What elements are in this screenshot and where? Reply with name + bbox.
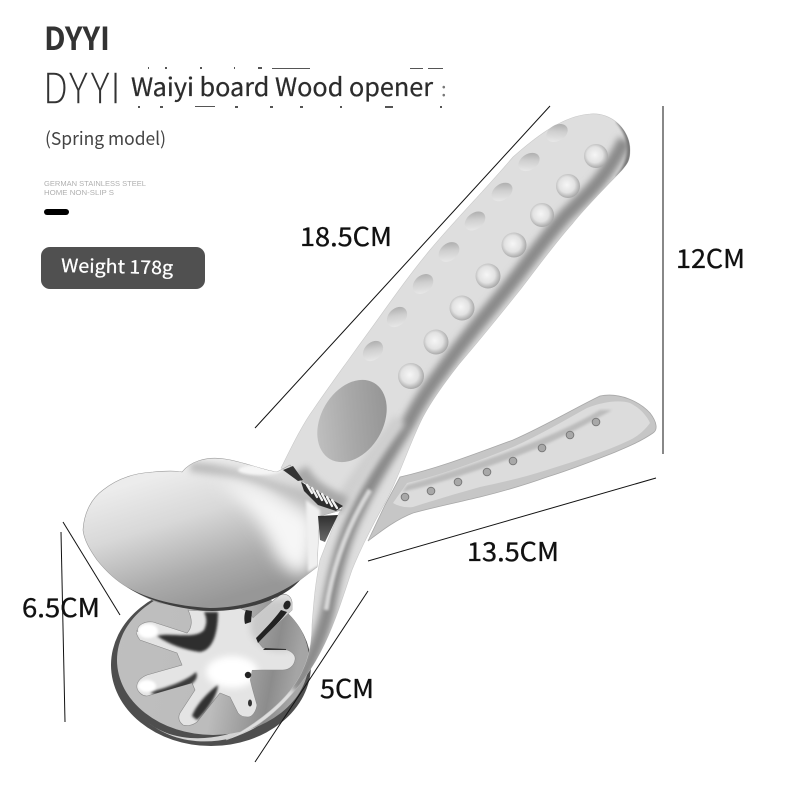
upper handle: [226, 114, 630, 740]
spoon plate: [83, 458, 342, 611]
brand title: DYYI: [44, 14, 110, 60]
dimension label: head width: 5CM: [320, 669, 374, 706]
small material note: [44, 179, 146, 197]
thumb oval: [303, 367, 401, 475]
disc base: [111, 584, 311, 746]
small material note: GERMAN STAINLESS STEEL: [44, 179, 146, 188]
product name: Waiyi board Wood opener: [131, 68, 433, 104]
bump row: [398, 144, 608, 389]
rivets: [401, 418, 600, 501]
dimension label: height: 12CM: [676, 239, 745, 276]
weight badge: Weight 178g: [61, 252, 174, 280]
lower handle: [368, 395, 656, 541]
accent bar: [44, 209, 69, 215]
tool illustration: [83, 114, 656, 746]
dimension label: lower handle: 13.5CM: [467, 532, 559, 569]
clipped text fragments: [138, 67, 443, 108]
dimension label: head length: 6.5CM: [22, 588, 100, 625]
small material note: HOME NON-SLIP S: [44, 188, 114, 197]
colon fragment: :: [441, 73, 447, 102]
subtitle: (Spring model): [45, 125, 166, 151]
spring: [283, 466, 343, 542]
weight badge: [41, 247, 205, 289]
star extractor: [136, 594, 310, 726]
dimension label: handle length: 18.5CM: [300, 217, 392, 254]
dimension lines: [61, 106, 663, 762]
thin brand logotype: DYYI: [44, 62, 120, 114]
dimple row: [359, 120, 571, 365]
